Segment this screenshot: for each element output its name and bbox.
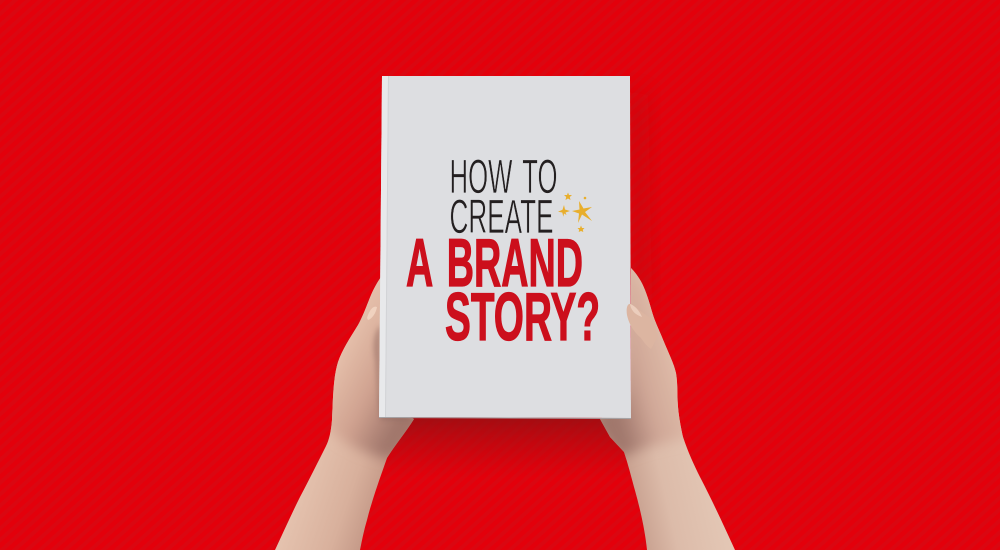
hero illustration [275,72,735,550]
right hand and arm [600,268,735,550]
title line: STORY?: STORY? [445,279,600,355]
book drop shadow [375,90,652,478]
title line: HOW TO: HOW TO [450,151,558,204]
right thumbnail [630,304,642,317]
book cover [379,76,631,419]
right thumb over book [627,304,658,349]
left hand and arm [275,278,414,550]
left thumbnail [367,307,377,320]
title line: A BRAND: A BRAND [406,225,583,301]
title line: CREATE: CREATE [450,191,554,244]
icon: gold sparkle stars [558,192,592,232]
title: book cover text [406,151,600,355]
